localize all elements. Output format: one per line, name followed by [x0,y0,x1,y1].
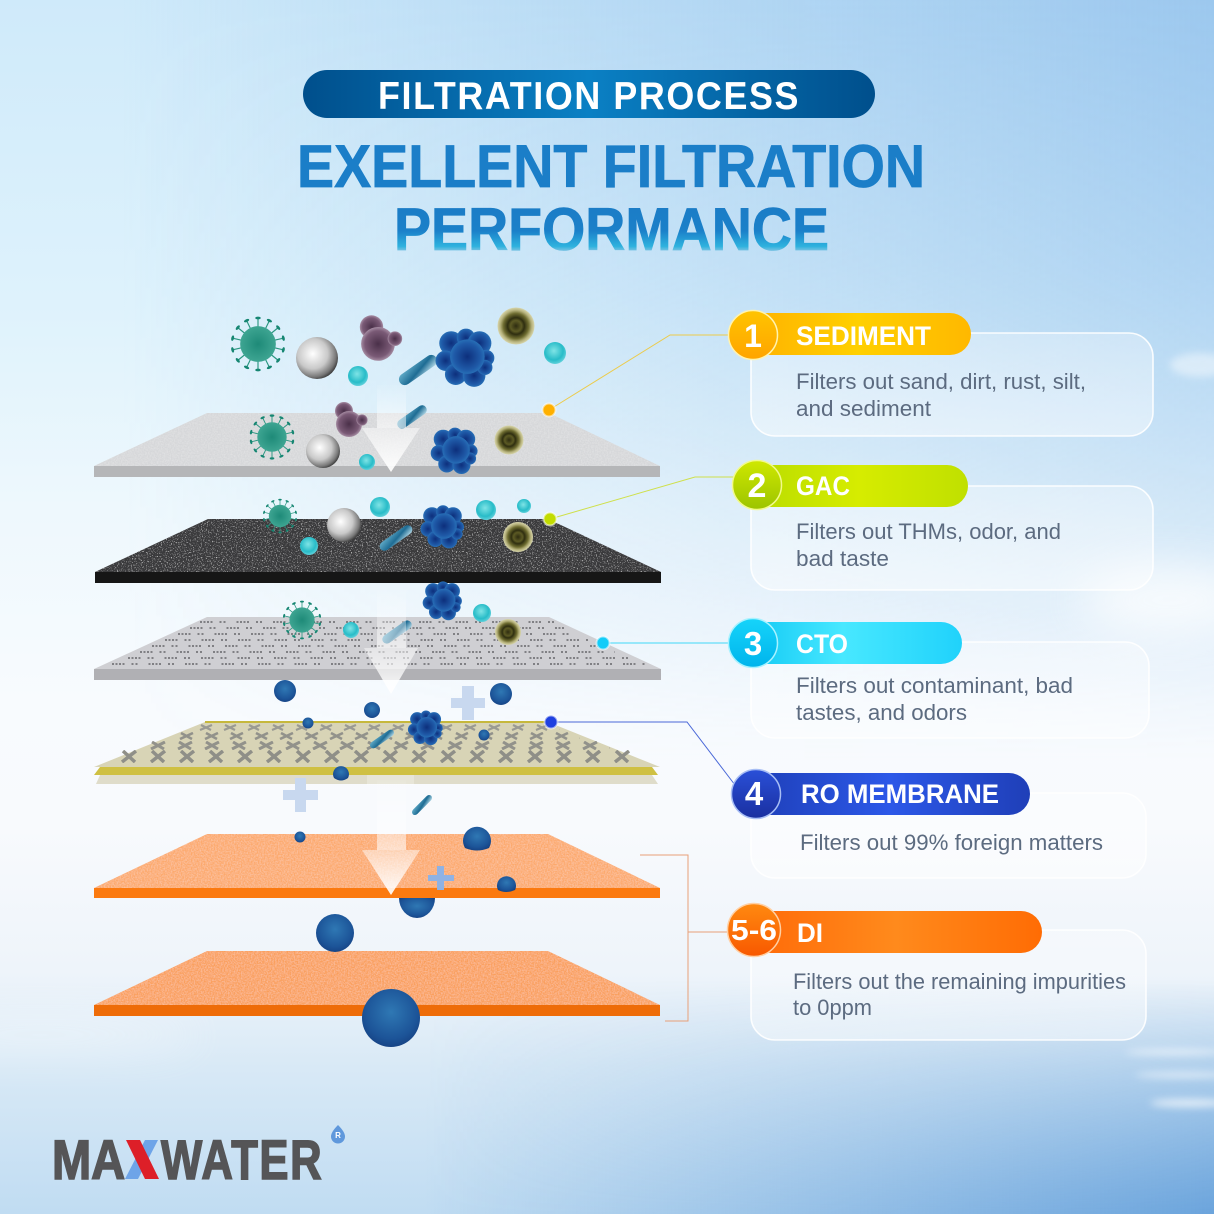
layer 1: sediment [94,413,660,477]
panel: sediment: Filters out sand, dirt, rust, silt, [796,369,1086,394]
panel: CTO [728,618,1149,738]
layer 6: DI orange [94,951,660,1016]
title pill: filtration process [303,70,875,118]
panel: sediment: SEDIMENT [796,321,931,351]
remaining impurity drops [274,680,516,1047]
panel: RO membrane: 4 [745,775,764,812]
layer 5: DI orange [94,834,660,898]
logo: Maxwater: R [335,1131,341,1140]
panel: CTO: CTO [796,629,848,659]
panel: RO membrane [732,770,1146,878]
logo: Maxwater: WATER [161,1129,322,1191]
connector dots [542,404,610,728]
layer 2: GAC [95,519,661,583]
panel: GAC: 2 [748,467,766,505]
panel: GAC: Filters out THMs, odor, and [796,519,1061,544]
panel: GAC: GAC [796,471,850,501]
panel: DI: to 0ppm [793,995,872,1020]
panel: RO membrane: Filters out 99% foreign matters [800,830,1103,855]
panel: DI: 5-6 [731,915,777,947]
contaminant particles: on CTO layer [283,581,521,645]
panel: CTO: tastes, and odors [796,700,967,725]
arrows: downward flow [362,385,420,895]
plus signs [283,686,485,890]
layer 3: CTO [94,617,661,680]
contaminant particles: unfiltered [231,308,566,387]
panel: GAC [732,460,1153,590]
panel: CTO: 3 [744,625,762,662]
panel: sediment: and sediment [796,396,931,421]
contaminant particles: on sediment layer [249,402,524,474]
logo: Maxwater [52,1125,345,1191]
panel: DI: DI [797,918,823,948]
headline: EXELLENT FILTRATION [297,133,925,200]
contaminant particles: on GAC layer [263,497,533,555]
panel: DI [728,904,1146,1040]
panel: DI: Filters out the remaining impurities [793,969,1126,994]
filter layer stack [94,413,661,1016]
logo: Maxwater: MA [52,1128,125,1191]
title pill: filtration process: FILTRATION PROCESS [378,74,798,117]
panel: RO membrane: RO MEMBRANE [801,779,999,809]
headline [297,133,925,263]
panel: CTO: Filters out contaminant, bad [796,673,1073,698]
panel: sediment: 1 [744,318,762,354]
layer 4: RO membrane [94,722,660,784]
panel: sediment [728,310,1153,436]
connector lines [549,335,735,1021]
headline: PERFORMANCE [394,196,829,263]
panel: GAC: bad taste [796,546,889,571]
